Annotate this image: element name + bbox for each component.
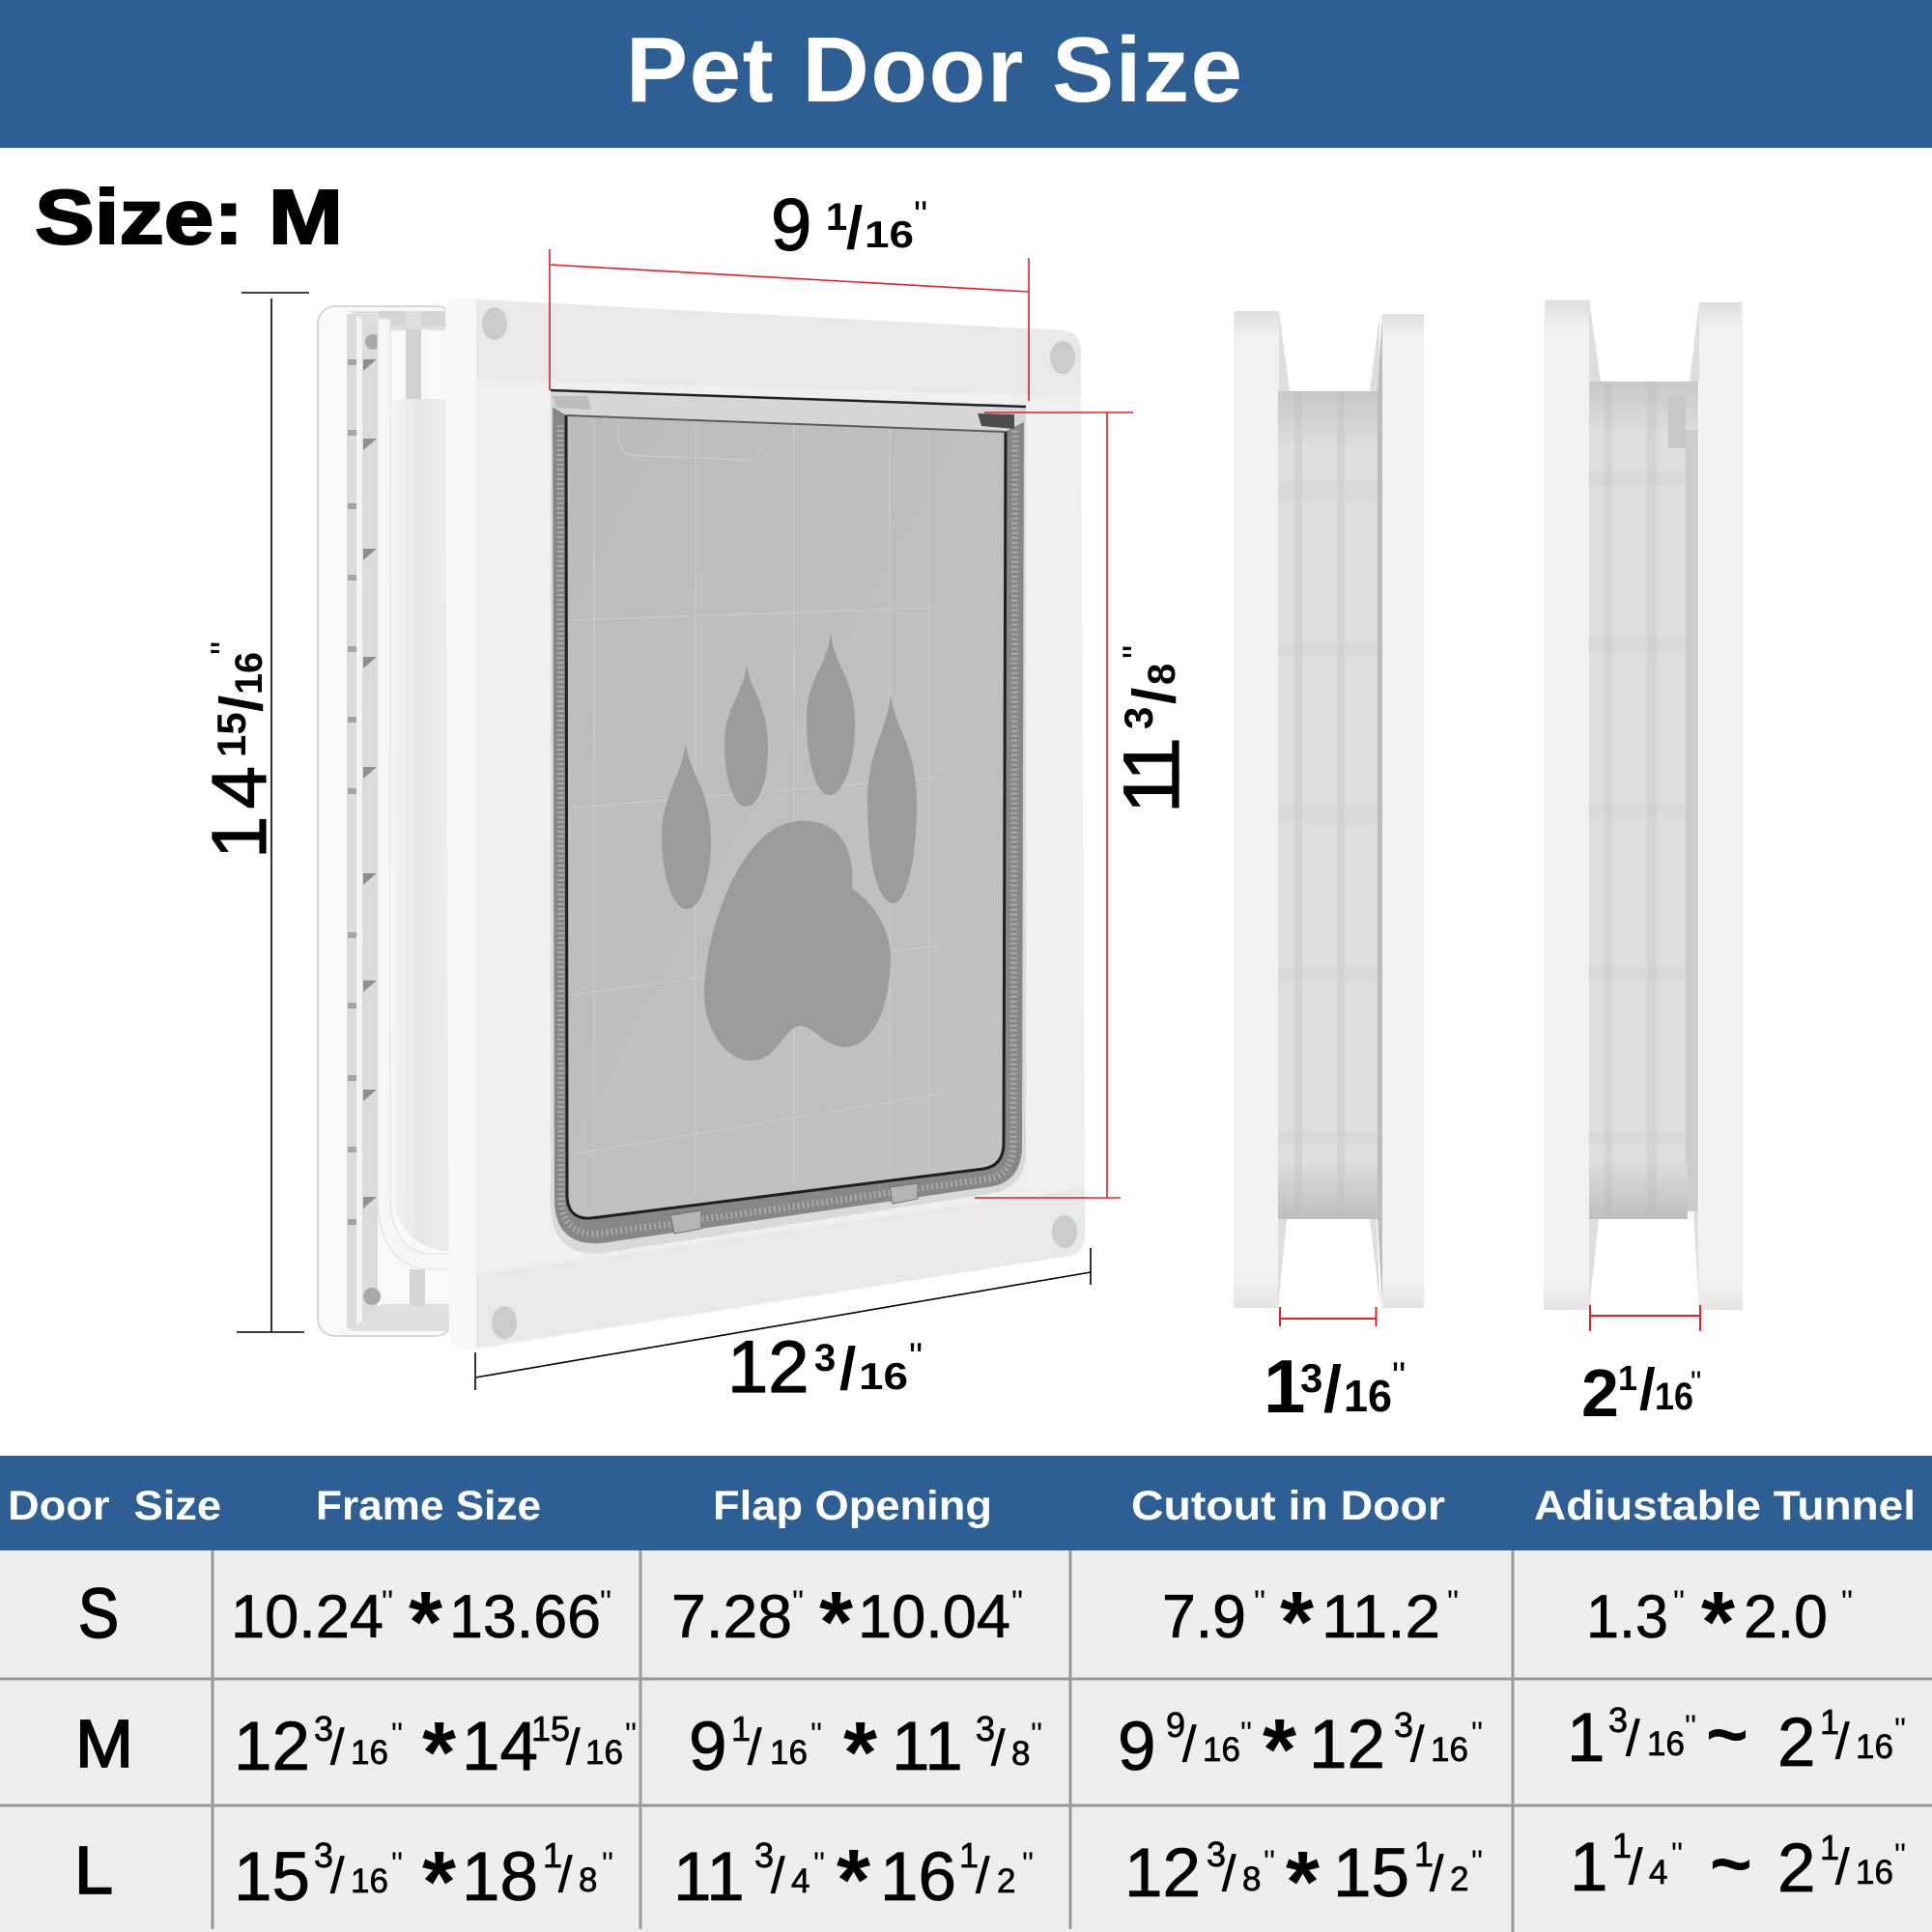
row S: 10.24 — [231, 1583, 384, 1651]
table header — [0, 1456, 1932, 1550]
row S: " — [1673, 1584, 1685, 1621]
row M: * — [843, 1705, 877, 1802]
label: wide tunnel depth: 1 — [1618, 1358, 1637, 1398]
row M: " — [810, 1717, 822, 1753]
label: wide tunnel depth — [1581, 1355, 1701, 1431]
row S: 1.3 — [1586, 1583, 1668, 1651]
side profile: narrow tunnel — [1234, 311, 1424, 1326]
red measure — [1590, 1305, 1700, 1331]
label: narrow tunnel depth: 1 — [1264, 1344, 1305, 1429]
row L: / — [330, 1848, 345, 1904]
row M: 3 — [1608, 1700, 1628, 1740]
row S: " — [600, 1584, 611, 1621]
paw print — [662, 632, 917, 1061]
row S: 7.9 — [1162, 1583, 1246, 1651]
table header: Flap Opening — [713, 1483, 992, 1529]
row M: " — [1894, 1712, 1906, 1748]
top rail — [551, 390, 1026, 432]
row L: ~ — [1710, 1823, 1752, 1904]
row M: " — [1685, 1709, 1696, 1746]
label: narrow tunnel depth — [1264, 1344, 1406, 1429]
row M: 16 — [770, 1734, 808, 1772]
row L: 4 — [1649, 1854, 1667, 1891]
row L: 1 — [1570, 1830, 1607, 1906]
row M: " — [625, 1717, 637, 1753]
row M: 3 — [314, 1709, 333, 1748]
row M: ~ — [1706, 1693, 1748, 1775]
table header: Frame Size — [316, 1483, 541, 1529]
red measure — [1280, 1307, 1376, 1326]
row M: / — [1410, 1717, 1425, 1773]
row S: " — [1254, 1584, 1265, 1621]
row L: / — [1629, 1839, 1643, 1895]
row M: * — [422, 1705, 456, 1802]
row M: / — [748, 1719, 762, 1776]
row L: * — [1286, 1834, 1320, 1931]
row S: * — [409, 1575, 442, 1671]
row S: " — [1011, 1584, 1023, 1621]
label: wide tunnel depth: 16 — [1655, 1376, 1693, 1418]
row M: * — [1263, 1702, 1296, 1799]
row L: " — [391, 1846, 403, 1883]
row L: 1 — [543, 1835, 562, 1875]
label: narrow tunnel depth: 3 — [1300, 1355, 1322, 1401]
row L: " — [1894, 1837, 1906, 1874]
label: narrow tunnel depth: / — [1323, 1352, 1342, 1426]
row M: M — [75, 1706, 133, 1781]
row S: " — [1447, 1584, 1459, 1621]
back frame — [318, 306, 453, 1336]
row M: 16 — [1203, 1731, 1240, 1769]
row L: " — [1471, 1844, 1483, 1881]
table background — [0, 1550, 1932, 1932]
row S: " — [1841, 1584, 1853, 1621]
row L: / — [558, 1847, 573, 1903]
row M: 8 — [1011, 1735, 1030, 1773]
dimension: flap height: 8 — [1141, 664, 1183, 685]
row L: 8 — [1242, 1861, 1261, 1898]
row M: / — [330, 1719, 345, 1776]
row M: / — [1626, 1711, 1640, 1767]
row L: " — [1264, 1844, 1275, 1881]
pet door product illustration — [318, 298, 1085, 1350]
row L: L — [74, 1833, 113, 1908]
row M: 12 — [1309, 1707, 1385, 1783]
row S: S — [78, 1576, 119, 1653]
flap opening — [551, 390, 1026, 1253]
row M: 16 — [1647, 1725, 1685, 1763]
dimension: flap height: " — [1116, 645, 1158, 659]
row M: / — [1182, 1717, 1197, 1773]
dimension: frame height: 14 — [196, 766, 282, 859]
row L: 3 — [1207, 1834, 1226, 1874]
row L: 12 — [1124, 1835, 1201, 1912]
label: wide tunnel depth: " — [1690, 1365, 1701, 1400]
flap panel — [566, 413, 1006, 1218]
row L — [74, 1823, 1906, 1931]
dimension: frame height: / — [209, 696, 275, 712]
row L: / — [976, 1848, 990, 1904]
title banner: Pet Door Size — [626, 18, 1242, 122]
dimension: frame width: " — [909, 1336, 923, 1378]
row L: 2 — [1450, 1861, 1468, 1898]
brush texture — [560, 425, 1015, 1234]
dimension: frame height: " — [204, 641, 246, 655]
row L: 15 — [1333, 1835, 1409, 1912]
row M: 12 — [234, 1709, 310, 1785]
row M: 3 — [976, 1709, 995, 1748]
row L: / — [1835, 1839, 1850, 1895]
dimension: frame width — [475, 1248, 1091, 1408]
row L: 11 — [673, 1839, 745, 1916]
row S: 10.04 — [858, 1583, 1010, 1651]
row L: 8 — [579, 1861, 597, 1899]
row S: * — [1701, 1575, 1735, 1671]
row S: 13.66 — [449, 1583, 601, 1651]
row M: 1 — [731, 1709, 751, 1748]
size heading: Size: M — [35, 174, 343, 260]
row M: 16 — [351, 1734, 388, 1772]
label: wide tunnel depth: / — [1639, 1357, 1656, 1422]
dimension: flap width: " — [914, 194, 927, 237]
row L: 1 — [1612, 1826, 1632, 1865]
tunnel — [378, 319, 450, 1269]
row M: 15 — [531, 1709, 570, 1748]
row M: " — [1031, 1717, 1042, 1753]
row S: * — [819, 1575, 853, 1671]
dimension: frame width: 16 — [859, 1356, 908, 1398]
size table — [0, 1456, 1932, 1932]
table header: Adiustable Tunnel — [1534, 1483, 1916, 1529]
dimension: flap width: 9 — [771, 185, 811, 267]
dimension: frame height: 15 — [209, 712, 254, 757]
hinges — [670, 1183, 918, 1234]
row L: 1 — [959, 1835, 979, 1875]
side profile: wide tunnel — [1544, 300, 1743, 1331]
dimension: frame width: 3 — [814, 1337, 836, 1379]
row L: 1 — [1820, 1828, 1839, 1867]
table header: Door Size — [8, 1483, 221, 1529]
dimension: flap width — [550, 185, 1029, 401]
row L: / — [771, 1848, 785, 1904]
row L: 16 — [351, 1862, 388, 1900]
row M: 3 — [1394, 1705, 1413, 1745]
row M: 9 — [689, 1709, 726, 1785]
row M: / — [566, 1719, 581, 1776]
row S: " — [382, 1584, 393, 1621]
row L: " — [602, 1846, 613, 1883]
row L: 2 — [997, 1862, 1015, 1900]
row L: 3 — [754, 1835, 774, 1875]
row S: " — [792, 1584, 804, 1621]
row L: / — [1430, 1846, 1444, 1902]
row L: 1 — [1414, 1834, 1434, 1874]
label: narrow tunnel depth: 16 — [1344, 1371, 1392, 1421]
row L: 15 — [234, 1839, 310, 1916]
dimension: flap height: / — [1122, 688, 1188, 704]
row L: " — [1022, 1846, 1034, 1883]
row L: 18 — [462, 1839, 538, 1916]
row L: * — [422, 1834, 456, 1931]
dimension: frame width: / — [839, 1336, 856, 1403]
row M: 16 — [585, 1734, 623, 1772]
row M: 9 — [1166, 1705, 1185, 1745]
row M: / — [991, 1720, 1006, 1776]
label: narrow tunnel depth: " — [1392, 1355, 1406, 1398]
dimension: frame height — [196, 293, 309, 1332]
dimension: flap height: 11 — [1108, 737, 1196, 813]
row M: / — [1835, 1714, 1850, 1770]
screw holes — [482, 307, 1077, 1339]
row L: / — [1222, 1846, 1236, 1902]
row L: " — [1671, 1836, 1683, 1873]
row S — [78, 1575, 1853, 1671]
row M: 1 — [1567, 1700, 1605, 1776]
row S: * — [1280, 1575, 1314, 1671]
row M: 1 — [1820, 1702, 1839, 1742]
row L: 4 — [791, 1862, 810, 1900]
row M: 14 — [462, 1709, 538, 1785]
row M — [75, 1693, 1906, 1802]
front plate — [445, 298, 1085, 1350]
dimension: flap width: / — [846, 195, 863, 262]
row M: " — [1240, 1716, 1252, 1752]
row M: 11 — [892, 1709, 963, 1785]
row L: 2 — [1777, 1831, 1816, 1907]
row L: 16 — [1856, 1854, 1893, 1891]
dimension: frame width: 12 — [727, 1326, 810, 1408]
dimension: flap height — [975, 412, 1196, 1198]
row S: 11.2 — [1321, 1583, 1440, 1651]
dimension: frame height: 16 — [228, 652, 270, 695]
row M: " — [391, 1717, 403, 1753]
dimension: flap height: 3 — [1116, 707, 1161, 729]
row M: " — [1471, 1716, 1483, 1752]
row S: 7.28 — [671, 1583, 792, 1651]
dimension: flap width: 1 — [826, 196, 847, 239]
row M: 9 — [1118, 1709, 1155, 1785]
row L: 16 — [880, 1839, 956, 1916]
row L: 3 — [314, 1835, 333, 1875]
row M: 16 — [1856, 1728, 1893, 1766]
title banner — [0, 0, 1932, 148]
row M: 2 — [1777, 1705, 1816, 1781]
row S: 2.0 — [1744, 1583, 1828, 1651]
dimension: flap width: 16 — [865, 214, 914, 256]
label: wide tunnel depth: 2 — [1581, 1355, 1619, 1431]
row L: " — [813, 1846, 825, 1883]
table header: Cutout in Door — [1131, 1483, 1445, 1529]
row L: * — [837, 1833, 870, 1929]
row M: 16 — [1431, 1731, 1468, 1769]
